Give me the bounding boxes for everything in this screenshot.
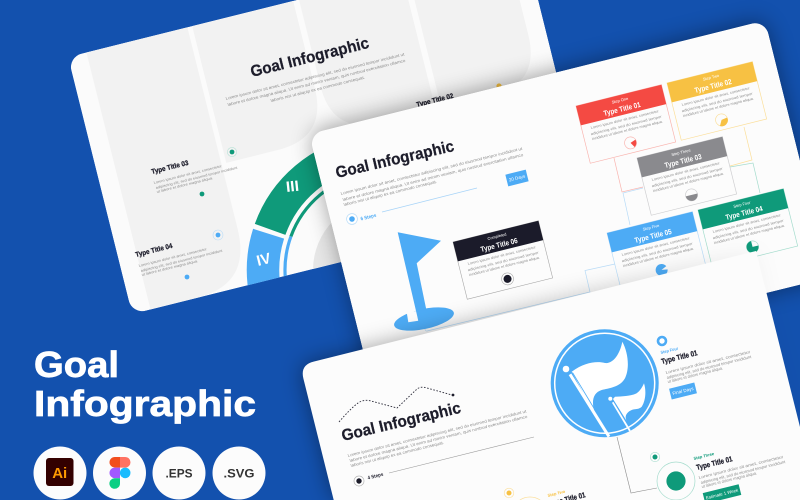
- item: step three: Type Title 01: [695, 454, 733, 472]
- item: type title 03: Type Title 03: [151, 160, 189, 176]
- card: step four: incididunt ut labore et dolore magna aliqua.: [714, 224, 785, 245]
- icon: svg badge: [212, 446, 266, 500]
- card: step two: incididunt ut labore et dolore magna aliqua.: [683, 97, 754, 118]
- icon: figma badge: [93, 446, 146, 500]
- item: step three: Lorem ipsum dolor sit amet, consectetur: [698, 454, 784, 480]
- inner arc green: [289, 190, 324, 237]
- panel: front slide: [303, 251, 800, 500]
- button: 20 days: 20 Days: [508, 173, 526, 182]
- steps marker: [354, 472, 384, 486]
- card: step three: [637, 137, 737, 215]
- card: completed: adipiscing elit, sed do eiusmod tempor: [467, 250, 540, 272]
- icon: eps badge: .EPS: [166, 466, 192, 480]
- card: step five: adipiscing elit, sed do eiusmod tempor: [621, 241, 694, 263]
- card: step two: Type Title 02: [694, 77, 733, 95]
- slide surface with grey columns: [68, 0, 588, 314]
- intro text: [347, 408, 529, 468]
- item: step two: Step Two: [547, 489, 566, 498]
- button: estimate 1 week: [703, 484, 741, 500]
- card: step four: Step Four: [733, 200, 752, 209]
- item: type title 03: Lorem ipsum dolor sit amet, consectetur: [153, 164, 223, 185]
- intro text: labore et dolore magna aliqua. Ut enim ad minim veniam, quis nostrud exercitation ullamco: [342, 152, 525, 202]
- intro text: [340, 146, 525, 207]
- item: type title 03: adipiscing elit, sed do eiusmod tempor incididunt: [155, 166, 238, 190]
- item: step three: [650, 451, 786, 500]
- icon: adobe illustrator badge: Ai: [52, 465, 67, 482]
- item: step four: [658, 337, 752, 384]
- card: step one: Lorem ipsum dolor sit amet, consectetur: [590, 109, 660, 130]
- card: step one: adipiscing elit, sed do eiusmod tempor: [590, 114, 663, 136]
- steps marker: 4 Steps: [367, 472, 384, 481]
- shadow of front slide: [302, 251, 800, 500]
- card: step one: Type Title 01: [603, 100, 642, 118]
- intro text: laboris nisi ut aliquip ex ea commodo consequat.: [343, 179, 437, 207]
- icon: big flag badge: [551, 329, 659, 437]
- inner grey disc: [313, 223, 341, 269]
- item: step four: Type Title 01: [660, 348, 698, 366]
- intro text: labore et dolore magna aliqua. Ut enim ad minim veniam, quis nostrud exercitation ullamco: [227, 58, 407, 107]
- card: completed: Lorem ipsum dolor sit amet, consectetur: [467, 245, 537, 266]
- intro text: Lorem ipsum dolor sit amet, consectetur adipiscing elit, sed do eiusmod tempor incididunt ut: [225, 51, 406, 101]
- card: step four: Lorem ipsum dolor sit amet, consectetur: [712, 213, 782, 234]
- steps marker: [347, 213, 377, 224]
- slide surface: [303, 251, 800, 500]
- card: step two: adipiscing elit, sed do eiusmod tempor: [681, 91, 754, 113]
- item: type title 04: [135, 243, 223, 277]
- button: final days: [669, 383, 697, 399]
- item: step four: Step Four: [660, 346, 679, 355]
- item: step four: ut labore et dolore magna aliqua.: [667, 365, 724, 384]
- card: completed: Type Title 06: [480, 236, 519, 254]
- shadow of middle slide: [309, 18, 800, 392]
- main heading: Infographic: [34, 383, 256, 424]
- item: step three: Step Three: [693, 451, 715, 461]
- card: step four: [698, 189, 798, 267]
- dotted trend path: [339, 387, 454, 422]
- button: final days: Final Days: [672, 386, 695, 396]
- inner arc blue: [283, 236, 292, 276]
- card: step three: incididunt ut labore et dolore magna aliqua.: [653, 172, 724, 193]
- icon: adobe illustrator badge: [34, 446, 86, 500]
- intro text: Lorem ipsum dolor sit amet, consectetur adipiscing elit, sed do eiusmod tempor incididunt ut: [340, 146, 524, 196]
- item: step four: adipiscing elit, sed do eiusmod tempor incididunt: [666, 354, 752, 380]
- card: step three: Lorem ipsum dolor sit amet, consectetur: [651, 161, 721, 182]
- button: 20 days: [505, 170, 529, 186]
- main heading: [34, 344, 256, 424]
- card: step five: incididunt ut labore et dolore magna aliqua.: [623, 247, 694, 268]
- item: type title 04: adipiscing elit, sed do eiusmod tempor incididunt: [140, 249, 223, 273]
- slide surface: [312, 23, 800, 350]
- icon: eps badge: [152, 446, 206, 500]
- card: completed: [453, 221, 553, 299]
- card: step four: Type Title 04: [725, 204, 764, 222]
- card: step two: Lorem ipsum dolor sit amet, consectetur: [681, 86, 751, 107]
- panel: middle slide: [312, 23, 800, 350]
- card: step two: [667, 62, 767, 140]
- slide title: Goal Infographic: [334, 138, 456, 182]
- card: step five: [607, 212, 707, 290]
- connectors: [424, 127, 760, 331]
- divider line: [382, 188, 477, 212]
- card: step five: Type Title 05: [634, 227, 673, 245]
- item: type title 04: Lorem ipsum dolor sit amet, consectetur: [138, 247, 208, 268]
- card: step one: [576, 85, 676, 163]
- main heading: Goal: [34, 344, 119, 385]
- steps marker: 6 Steps: [360, 213, 377, 222]
- intro text: laboris nisi ut aliquip ex ea commodo consequat.: [270, 75, 365, 103]
- card: step five: Step Five: [642, 223, 660, 232]
- item: step three: adipiscing elit, sed do eiusmod tempor incididunt: [700, 459, 786, 485]
- card: step two: Step Two: [702, 73, 720, 82]
- card: step five: Lorem ipsum dolor sit amet, consectetur: [621, 236, 691, 257]
- numeral IV: IV: [255, 250, 273, 270]
- item: type title 03: ut labore et dolore magna aliqua.: [156, 176, 214, 194]
- card: step one: Step One: [611, 96, 629, 105]
- item: type title 04: ut labore et dolore magna aliqua.: [141, 259, 199, 277]
- item: step four: Lorem ipsum dolor sit amet, consectetur: [665, 349, 751, 375]
- connector line: [617, 437, 657, 493]
- intro text: Lorem ipsum dolor sit amet, consectetur adipiscing elit, sed do eiusmod tempor incididunt ut: [347, 408, 528, 458]
- item: type title 02: Type Title 02: [416, 93, 454, 109]
- ring segment IV: [263, 234, 279, 330]
- card: step one: incididunt ut labore et dolore magna aliqua.: [592, 120, 663, 141]
- icon: svg badge: .SVG: [224, 466, 254, 480]
- card: completed: incididunt ut labore et dolore magna aliqua.: [469, 256, 540, 277]
- icon: golf flag: [392, 232, 456, 335]
- slide title: Goal Infographic: [340, 400, 463, 445]
- item: step three: ut labore et dolore magna aliqua.: [701, 470, 758, 489]
- item: type title 03: [151, 160, 238, 194]
- card: step three: adipiscing elit, sed do eiusmod tempor: [651, 166, 724, 188]
- card: step four: adipiscing elit, sed do eiusmod tempor: [712, 218, 785, 240]
- slide title: Goal Infographic: [249, 35, 371, 81]
- numeral III: III: [285, 178, 300, 196]
- item: type title 04: Type Title 04: [135, 243, 173, 259]
- intro text: labore et dolore magna aliqua. Ut enim ad minim veniam, quis nostrud exercitation ullamco: [349, 414, 529, 463]
- card: completed: Completed: [487, 232, 507, 241]
- intro text: laboris nisi ut aliquip ex ea commodo consequat.: [350, 440, 444, 468]
- panel: back slide: [70, 0, 556, 312]
- card: step three: Type Title 03: [664, 152, 703, 170]
- divider line: [389, 437, 534, 473]
- ring segment III: [254, 152, 322, 235]
- card: step three: Step Three: [671, 147, 692, 157]
- marker dots: [185, 83, 502, 279]
- item: step two: [504, 488, 586, 500]
